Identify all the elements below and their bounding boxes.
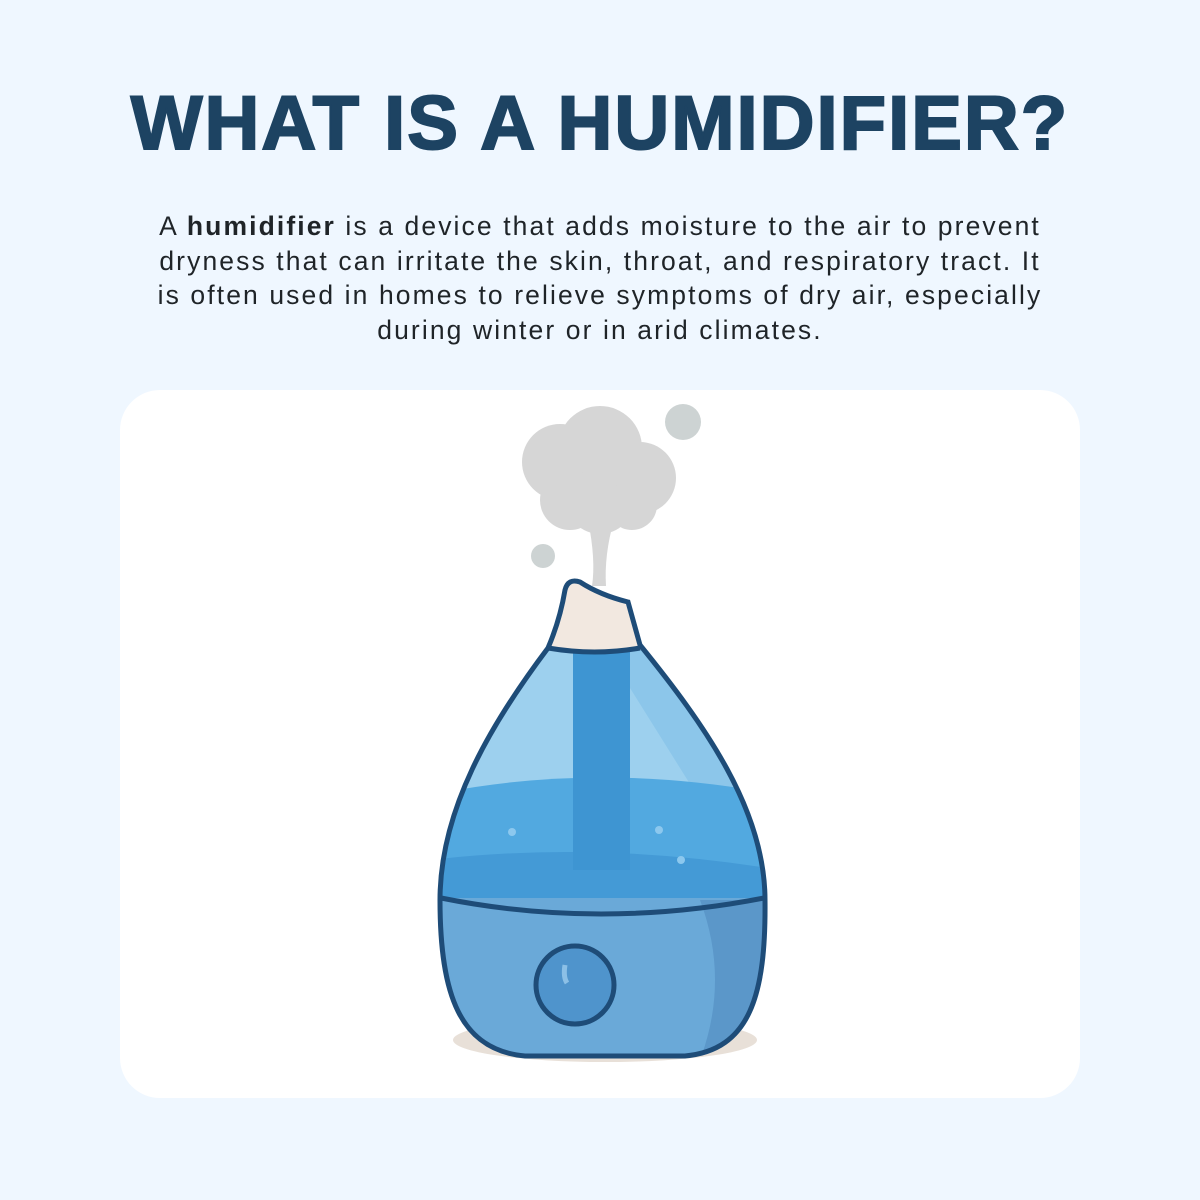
shadow xyxy=(453,1018,757,1062)
humidifier body xyxy=(430,570,780,1070)
knob xyxy=(536,946,614,1024)
illustration: humidifier xyxy=(438,404,768,1062)
title: WHAT IS A HUMIDIFIER? xyxy=(131,81,1069,166)
description text: A humidifier is a device that adds moisture to the air to prevent dryness that can irritate the skin, throat, and respiratory tract. It is often used in homes to relieve symptoms of dry air, especially during winter or in arid climates. xyxy=(158,211,1042,344)
panel: illustration card xyxy=(120,390,1080,1098)
steam cloud xyxy=(522,404,701,586)
